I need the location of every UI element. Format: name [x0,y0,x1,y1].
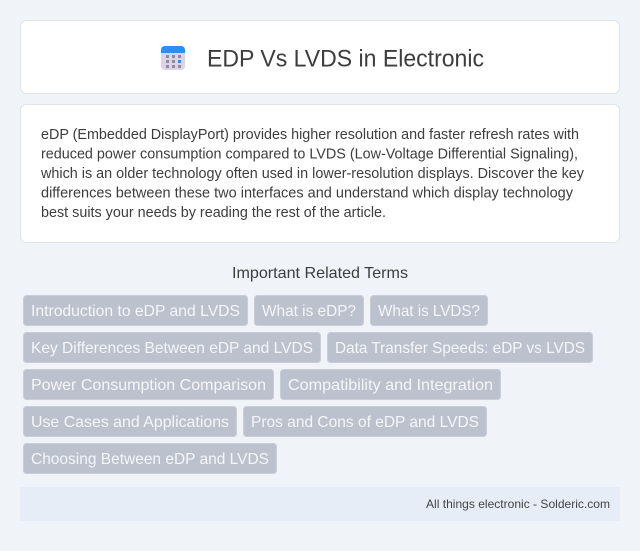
text block: intro [40,127,585,221]
tag [24,444,276,474]
tag [328,332,592,362]
footer text: All things electronic - Solderic.com [426,497,610,511]
tag [254,296,364,326]
tag: Use Cases and Applications [31,414,229,431]
title: EDP Vs LVDS in Electronic [207,46,484,72]
tag [24,406,236,436]
tag: Key Differences Between eDP and LVDS [31,340,313,357]
tag [280,370,500,400]
tag: Introduction to eDP and LVDS [31,303,240,320]
text block: intro: eDP (Embedded DisplayPort) provides higher resolution and faster refresh rates with [41,127,579,143]
panel: intro paragraph [20,104,620,242]
tag: What is eDP? [262,303,356,320]
text block: intro: which is an older technology often used in lower-resolution displays. Discover the key [40,166,585,182]
text block: intro: differences between these two interfaces and understand which display technology [41,186,574,202]
tag list [24,296,592,474]
tag: Choosing Between eDP and LVDS [31,451,269,468]
tag [244,406,486,436]
tag [24,332,320,362]
footer [20,487,620,521]
tag: Pros and Cons of eDP and LVDS [251,414,479,431]
icon: calendar [161,46,185,70]
tag: Compatibility and Integration [288,377,493,394]
text block: intro: best suits your needs by reading the rest of the article. [41,205,386,221]
panel: title card [20,20,620,94]
tag [370,296,488,326]
tag [24,370,274,400]
tag: Power Consumption Comparison [31,377,266,394]
text block: intro: reduced power consumption compared to LVDS (Low-Voltage Differential Signaling), [41,146,578,162]
tag: Data Transfer Speeds: eDP vs LVDS [335,340,585,357]
heading: related terms: Important Related Terms [232,265,408,282]
tag: What is LVDS? [378,303,480,320]
tag [24,296,248,326]
